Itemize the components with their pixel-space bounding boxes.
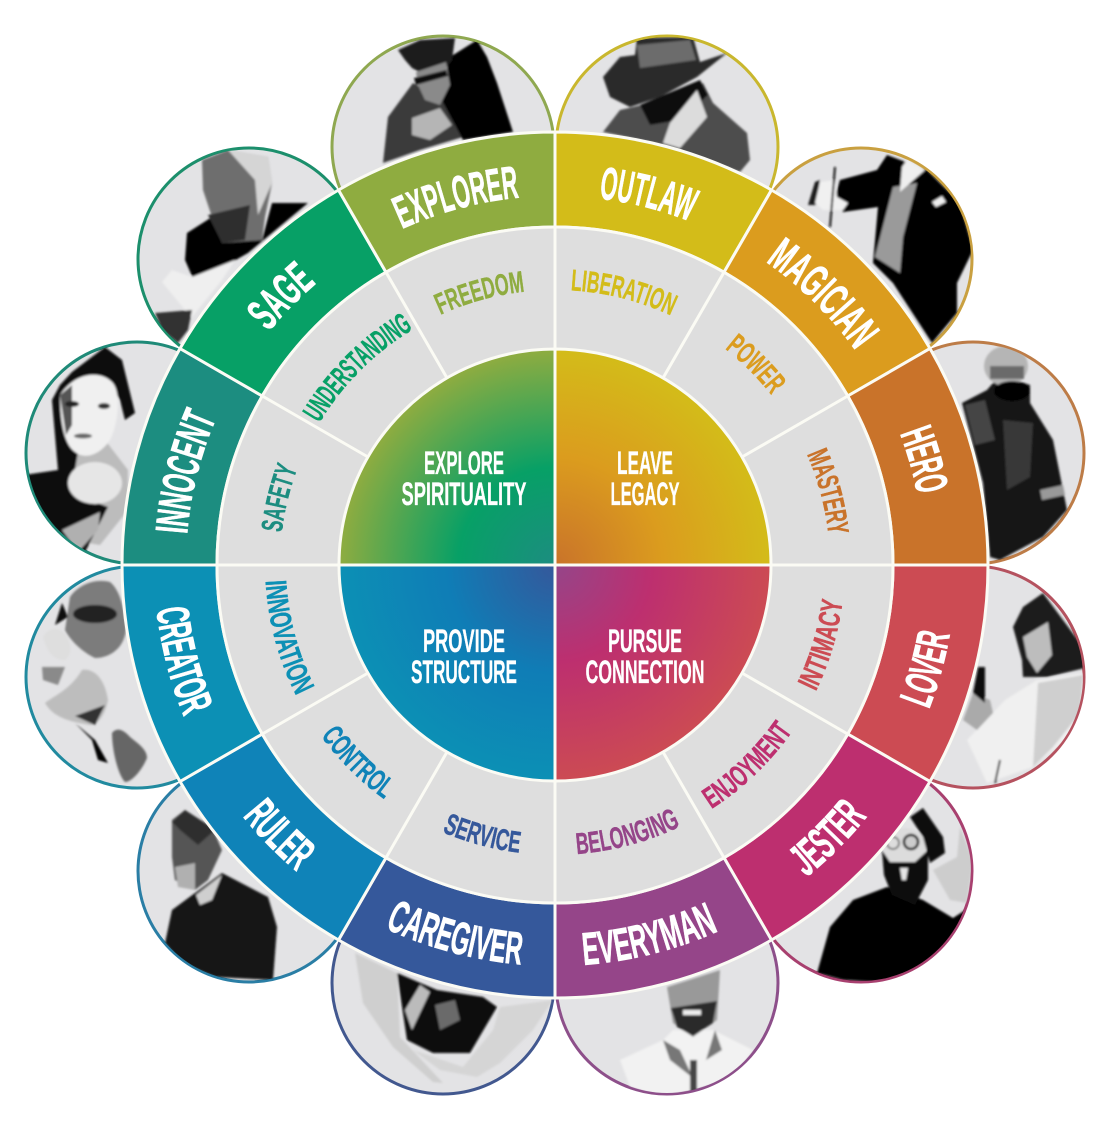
label: outlaw: OUTLAW [601,167,701,220]
label: innocent: INNOCENT [155,406,214,533]
wedge: innocent [122,348,262,565]
label: creator: CREATOR [156,607,212,717]
quadrant: explore spirituality [339,349,555,565]
label: sage: SAGE [248,260,316,329]
photo petal: magician [773,146,974,347]
center text: pursue connection: PURSUE [608,623,682,659]
label: understanding: UNDERSTANDING [302,314,411,420]
middle ring: motivations background [217,227,893,903]
photo petal: hero [932,340,1086,564]
label: enjoyment: ENJOYMENT [700,719,790,809]
center text: leave legacy: LEGACY [610,476,680,512]
photo petal: lover [932,566,1086,790]
outer ring: archetype wedges [122,132,988,998]
label: intimacy: INTIMACY [798,598,842,691]
center text: provide structure: STRUCTURE [411,654,517,690]
wedge: sage [180,190,386,396]
center text: explore spirituality: EXPLORE [424,445,504,481]
wedge: creator [122,565,262,782]
photo petal: jester [773,783,974,984]
motivation labels [262,270,850,854]
center text: leave legacy: LEAVE [617,445,673,481]
label: power: POWER [726,333,786,396]
label: lover: LOVER [899,630,950,708]
photo petal: ruler [136,783,337,984]
label: mastery: MASTERY [807,447,850,532]
quadrant: provide structure [339,565,555,781]
label: hero: HERO [900,424,948,492]
center text: pursue connection [586,623,704,690]
label: belonging: BELONGING [576,809,678,854]
center text: explore spirituality: SPIRITUALITY [402,476,526,512]
quadrant: leave legacy [555,349,771,565]
photo petal: outlaw [556,34,780,188]
center text: provide structure: PROVIDE [423,623,505,659]
wedge: explorer [338,132,555,272]
photo petal: sage [136,146,337,347]
center text: provide structure [411,623,517,690]
center circle: four quadrants [339,349,771,781]
center text: leave legacy [610,445,680,512]
middle ring spokes [217,227,893,903]
archetype labels [155,166,950,966]
photo petal: caregiver [330,942,554,1096]
quadrant: pursue connection [555,565,771,781]
label: safety: SAFETY [262,462,296,532]
wedge: everyman [555,858,772,998]
label: magician: MAGICIAN [766,236,880,350]
photo petal: creator [24,566,178,790]
wedge: hero [848,348,988,565]
label: explorer: EXPLORER [390,166,520,229]
photo petal: everyman [556,942,780,1096]
label: service: SERVICE [444,814,522,853]
label: innovation: INNOVATION [265,580,315,695]
wedge: magician [724,190,930,396]
label: ruler: RULER [243,796,314,872]
wedge: ruler [180,734,386,940]
photo petal: explorer [330,34,554,188]
wedge: caregiver [338,858,555,998]
photo petal: innocent [24,340,178,564]
center text: explore spirituality [402,445,526,512]
wedge: outlaw [555,132,772,272]
label: jester: JESTER [790,800,868,876]
center text: pursue connection: CONNECTION [586,654,704,690]
wedge: lover [848,565,988,782]
wedge: jester [724,734,930,940]
label: control: CONTROL [324,726,392,800]
label: caregiver: CAREGIVER [388,902,522,965]
label: everyman: EVERYMAN [582,902,718,966]
label: freedom: FREEDOM [433,271,524,315]
label: liberation: LIBERATION [572,270,678,316]
